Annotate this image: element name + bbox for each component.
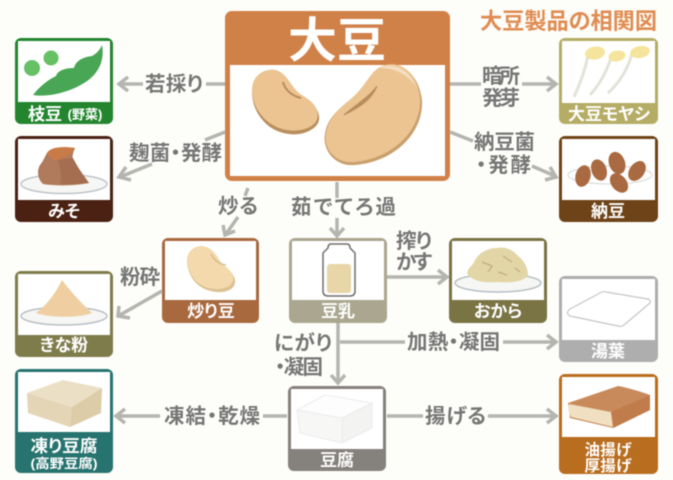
arrow: bittern to tofu — [331, 323, 345, 383]
arrow: crush to kinako — [118, 291, 162, 318]
label: crush: 粉砕 — [120, 266, 160, 289]
label: freeze-dry: 凍結・乾燥 — [164, 405, 260, 428]
label: koji fermentation: 麹菌・発酵 — [129, 142, 222, 165]
arrow: natto bacteria fermentation — [450, 132, 556, 180]
panel: kinako: きな粉 — [40, 336, 88, 355]
arrow: roast — [223, 188, 248, 235]
panel: tofu: 豆腐 — [320, 451, 354, 470]
label: roast: 炒る — [218, 195, 258, 218]
panel: soy milk — [289, 238, 387, 323]
arrow: young harvest to edamame — [119, 77, 225, 91]
panel: fried tofu: 油揚げ — [584, 441, 632, 459]
panel: fried tofu: 厚揚げ — [584, 457, 632, 475]
panel: kinako — [15, 271, 113, 357]
panel: soybean — [225, 11, 450, 181]
panel: soybean sprouts — [559, 38, 658, 124]
panel: roasted beans: 炒り豆 — [187, 302, 235, 321]
label: squeeze residue — [396, 230, 433, 274]
label: dark germination — [482, 65, 520, 110]
label: bittern and coagulate: にがり — [274, 331, 332, 355]
panel: soybean: 大豆 — [288, 15, 386, 68]
panel: freeze-dried tofu — [15, 369, 113, 473]
panel: soy milk: 豆乳 — [321, 302, 355, 321]
panel: edamame: (野菜) — [68, 107, 102, 122]
label: deep fry: 揚げる — [425, 405, 486, 428]
panel: okara — [449, 238, 547, 323]
label: natto bacteria fermentation — [474, 131, 535, 177]
panel: yuba — [559, 276, 658, 362]
label: natto bacteria fermentation: ・発酵 — [476, 154, 531, 177]
arrow: boil and strain — [330, 182, 344, 236]
panel: yuba: 湯葉 — [591, 342, 625, 361]
arrow: squeeze residue to okara — [387, 270, 447, 284]
arrow: dark germination to sprouts — [450, 77, 556, 91]
label: young harvest: 若採り — [145, 73, 203, 96]
panel: natto: 納豆 — [591, 202, 625, 221]
arrow: heat and coagulate to yuba — [340, 335, 556, 349]
panel: freeze-dried tofu: (高野豆腐) — [30, 456, 98, 471]
label: bittern and coagulate: ・凝固 — [275, 356, 323, 379]
label: heat and coagulate: 加熱・凝固 — [407, 331, 500, 354]
panel: miso — [15, 136, 113, 222]
arrow: deep fry — [387, 409, 556, 423]
label: bittern and coagulate — [274, 331, 332, 379]
panel: roasted beans — [162, 238, 259, 323]
panel: okara: おから — [474, 302, 522, 321]
arrow: freeze-dry to koya tofu — [116, 409, 287, 423]
panel: fried tofu — [559, 374, 658, 475]
label: dark germination: 暗所 — [482, 65, 520, 88]
panel: edamame: 枝豆 — [28, 105, 62, 124]
arrow: koji fermentation to miso — [119, 132, 225, 180]
panel: tofu — [288, 386, 386, 471]
label: squeeze residue: 搾り — [396, 230, 432, 253]
panel: freeze-dried tofu: 凍り豆腐 — [30, 436, 98, 456]
panel: miso: みそ — [48, 202, 80, 221]
label: squeeze residue: かす — [396, 251, 433, 274]
panel: soybean sprouts: 大豆モヤシ — [568, 105, 650, 124]
label: dark germination: 発芽 — [482, 87, 520, 110]
label: natto bacteria fermentation: 納豆菌 — [474, 131, 535, 154]
title: 大豆製品の相関図 — [480, 9, 657, 34]
label: boil and strain: 茹でてろ過 — [291, 196, 396, 219]
panel: natto — [559, 136, 658, 222]
panel: edamame — [15, 38, 113, 124]
